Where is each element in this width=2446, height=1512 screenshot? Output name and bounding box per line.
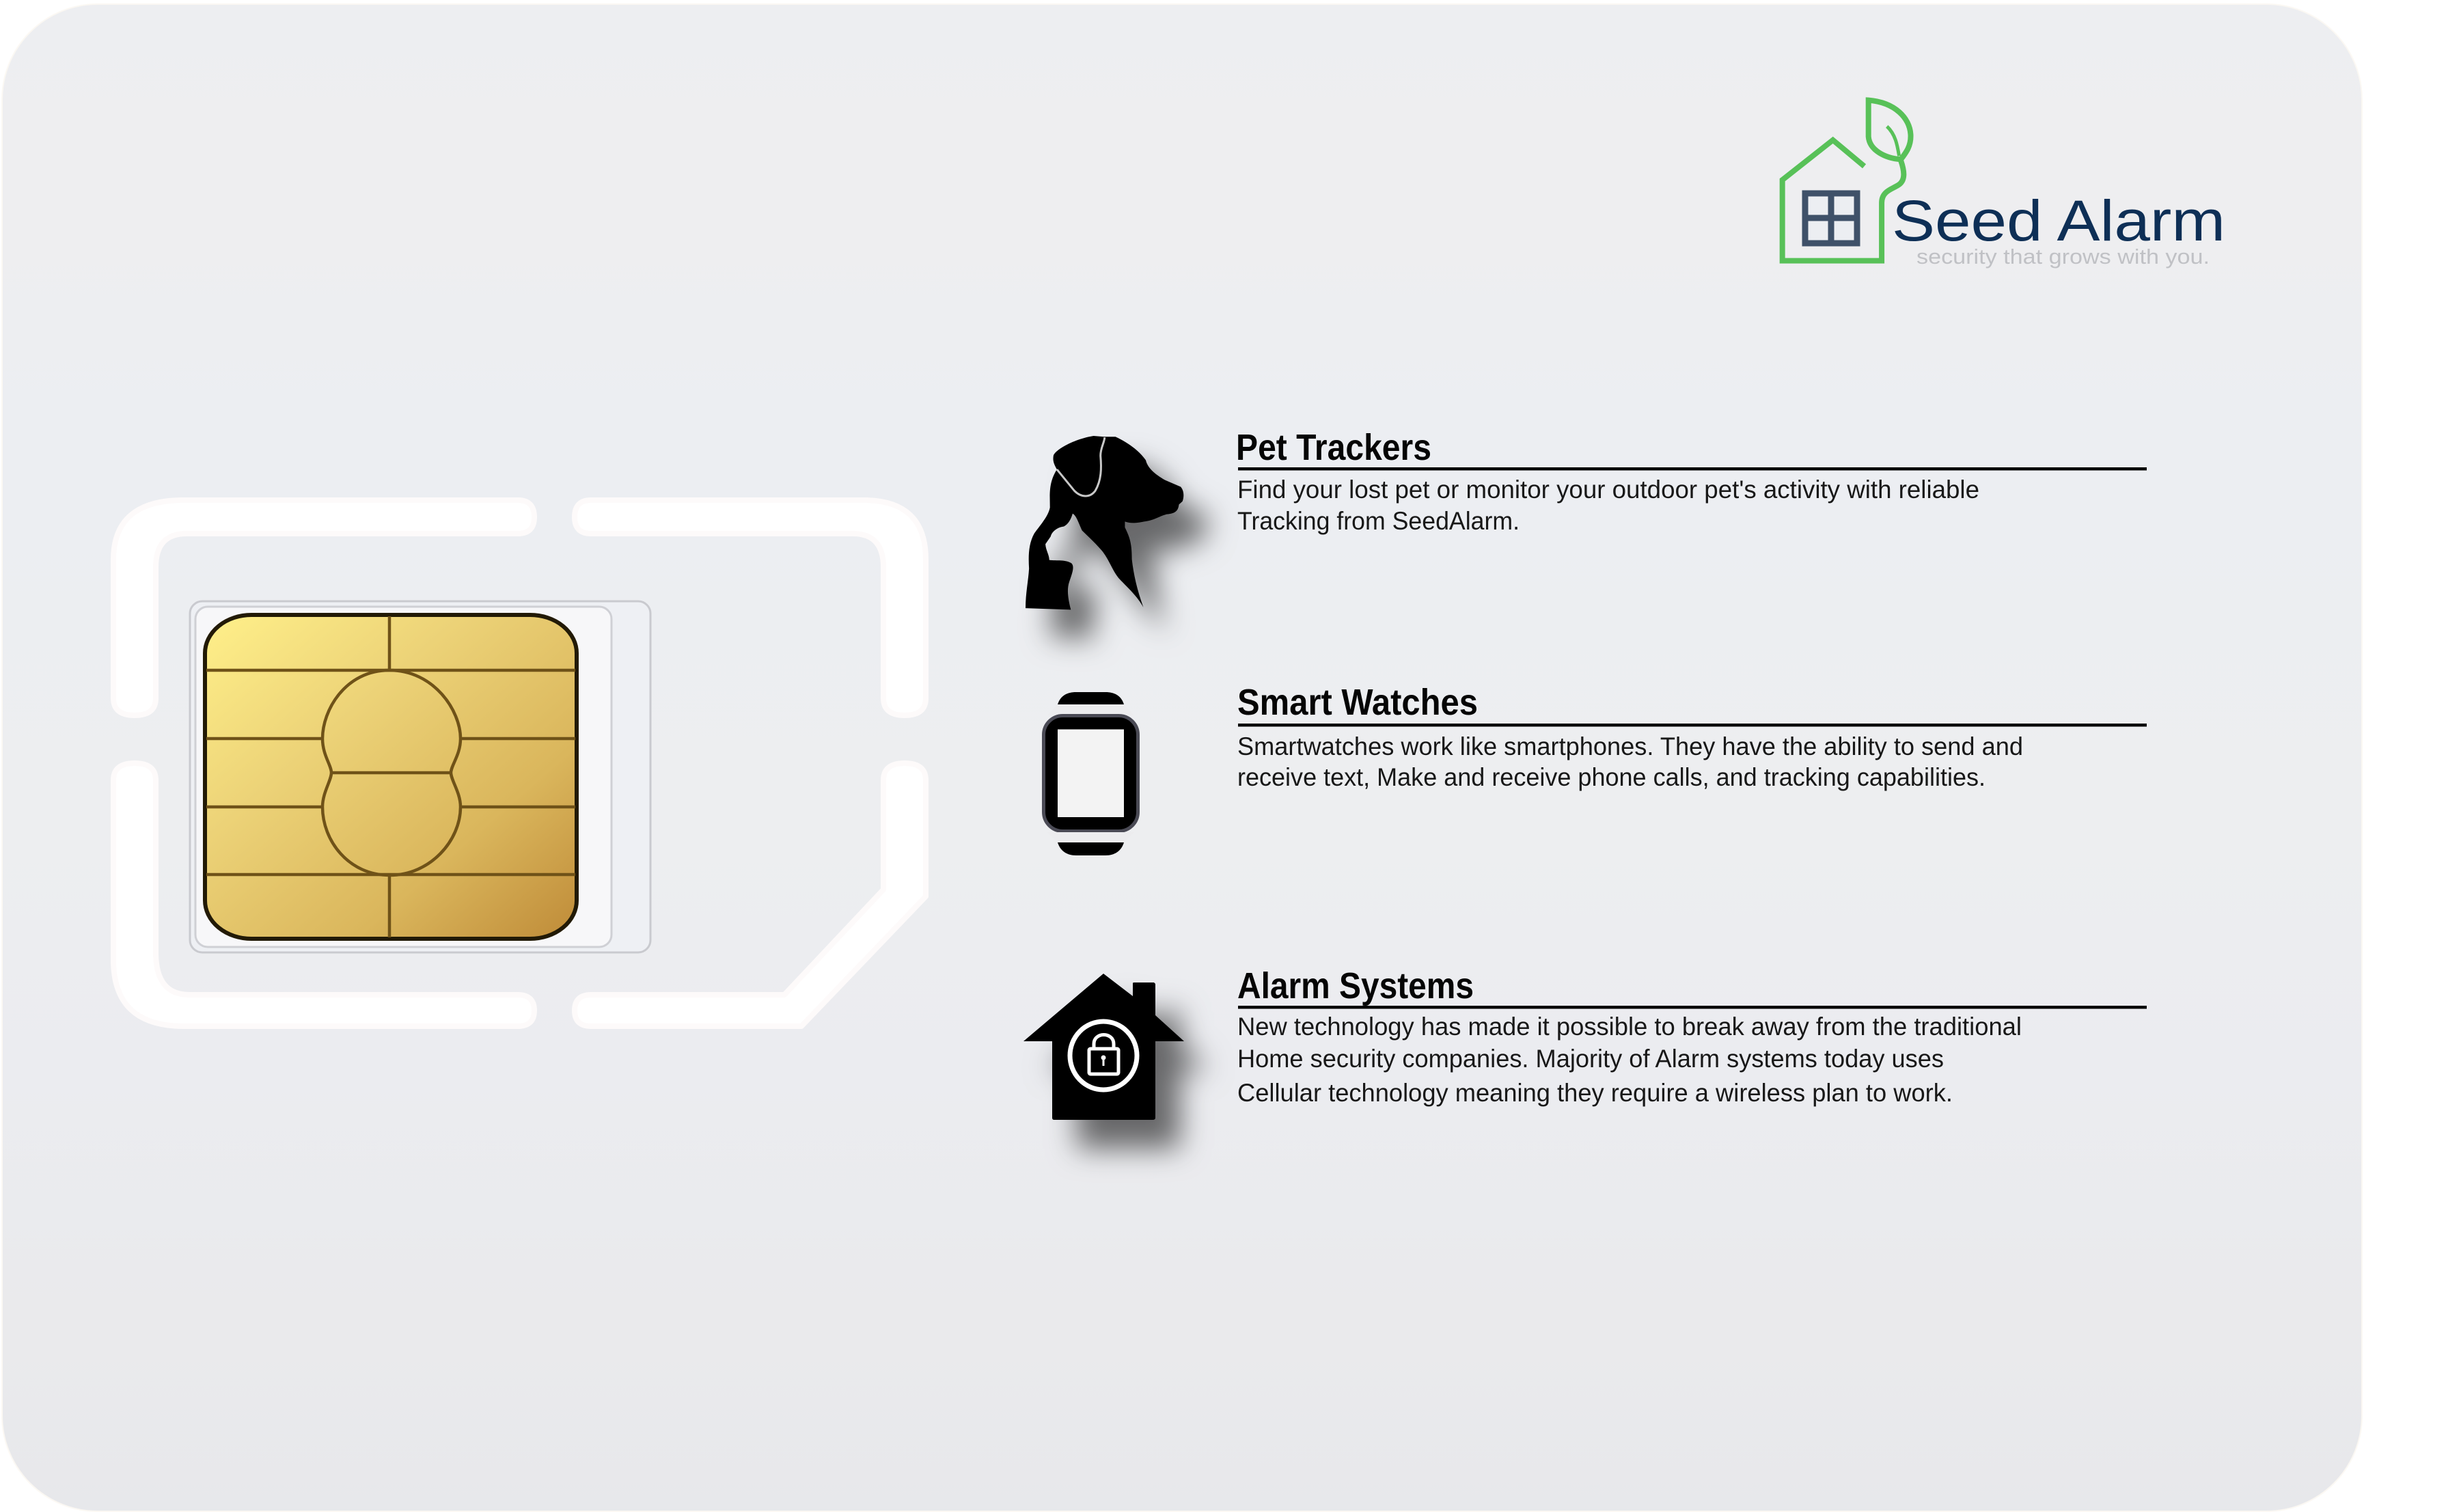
logo: Seed Alarm [1783,100,2225,269]
gold SIM chip [205,615,577,939]
slot: bottom right [575,763,926,1026]
chip holder outlines [190,601,650,952]
logo tagline: security that grows with you. [1916,245,2210,269]
section: Alarm Systems [1237,965,2147,1107]
section: Pet Trackers: Tracking from SeedAlarm. [1237,507,1520,535]
logo wordmark: Seed Alarm [1892,189,2225,253]
text: Smart Watches body: Smartwatches work like smartphones. They have the ability to send and [1237,732,2023,760]
section: Alarm Systems: Home security companies. Majority of Alarm systems today uses [1237,1045,1944,1073]
icon: dog and cat silhouette [1026,436,1183,609]
slot: top right [575,500,926,715]
section: Pet Trackers [1236,427,2147,535]
icon: house with padlock [1023,974,1184,1120]
icon: smart watch [1044,692,1138,855]
slot: bottom left [113,763,534,1026]
section: Smart Watches [1237,682,2147,791]
SIM cut-out slots [113,500,926,1026]
text: Alarm Systems body: New technology has made it possible to break away from the traditional [1237,1013,2022,1041]
heading: Pet Trackers: Pet Trackers [1236,427,1431,468]
section: Alarm Systems: Cellular technology meaning they require a wireless plan to work. [1237,1079,1953,1107]
text: Pet Trackers body: Find your lost pet or monitor your outdoor pet's activity with reliable [1237,476,1979,504]
section: Smart Watches: receive text, Make and receive phone calls, and tracking capabilities. [1237,763,1985,791]
heading: Smart Watches: Smart Watches [1237,682,1478,723]
logo icon: window [1805,193,1857,243]
slot: top left [113,500,534,715]
logo icon: house with leaf [1783,100,1911,261]
heading: Alarm Systems: Alarm Systems [1237,965,1474,1006]
